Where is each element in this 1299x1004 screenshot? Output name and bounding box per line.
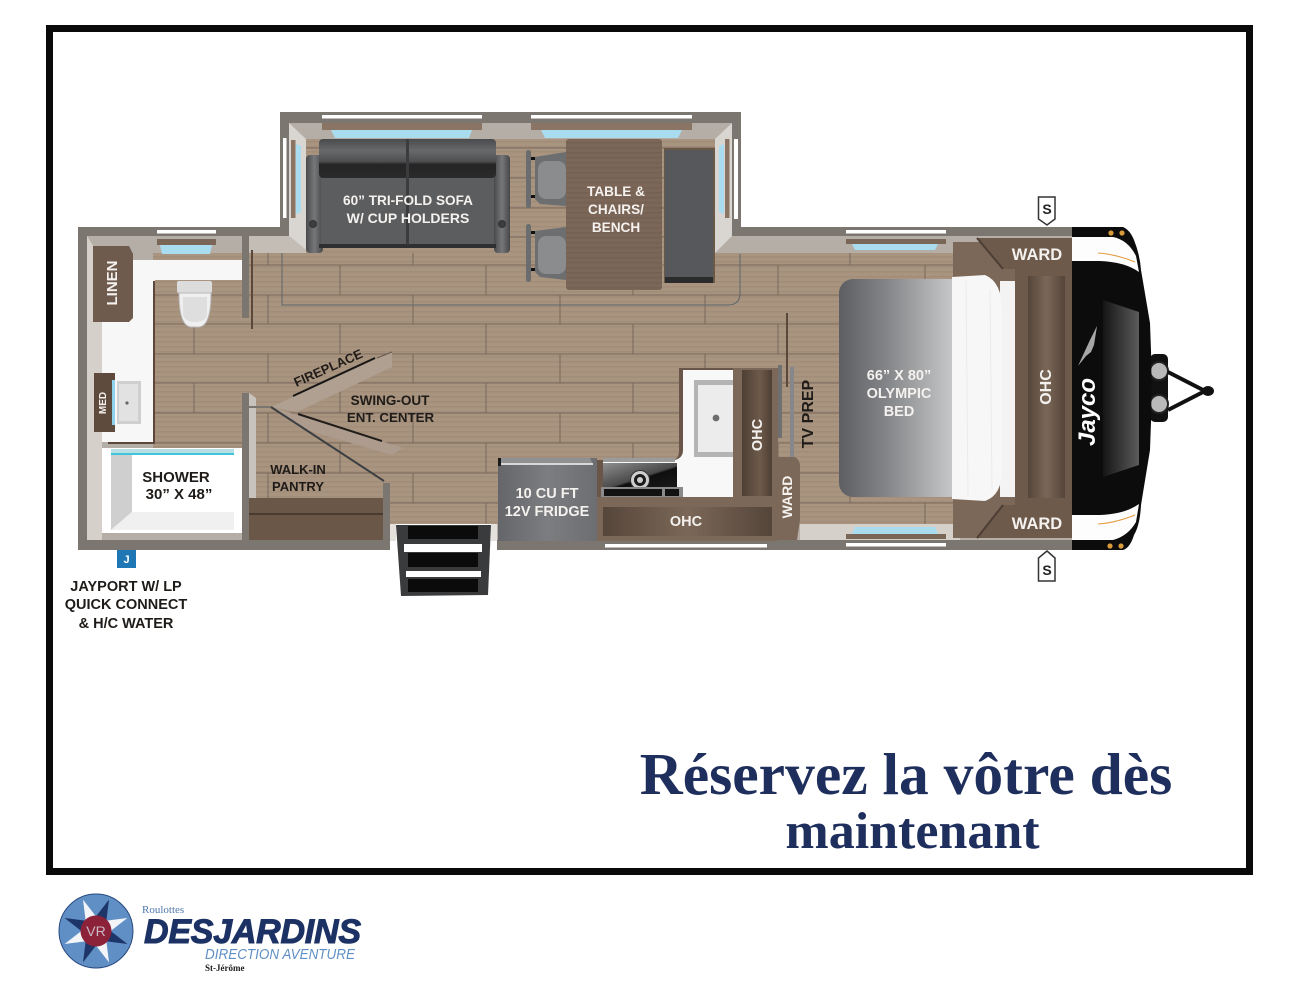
- dining table: [566, 139, 662, 290]
- white cap accents: [1072, 237, 1139, 272]
- sheets: [1000, 281, 1015, 497]
- bathroom partition: [242, 236, 249, 318]
- entertainment center label: ENT. CENTER: [347, 410, 434, 425]
- jayport marker: [117, 550, 136, 568]
- bathroom: [93, 236, 253, 533]
- bed label line two: OLYMPIC: [867, 386, 932, 402]
- logo wordmark: DESJARDINS: [144, 913, 361, 951]
- logo tagline: DIRECTION AVENTURE: [205, 947, 355, 963]
- sofa: [306, 139, 510, 253]
- dining table: CHAIRS/: [588, 202, 644, 217]
- stabilizer marker bottom: [1038, 551, 1055, 581]
- tv prep: TV PREP: [800, 379, 817, 448]
- swing-out label: SWING-OUT: [351, 393, 430, 408]
- kitchen wardrobe: WARD: [779, 476, 795, 518]
- jayco wordmark: Jayco: [1074, 378, 1101, 446]
- bed label line three: BED: [884, 404, 914, 420]
- jayport label: QUICK CONNECT: [65, 597, 187, 613]
- compass badge: [59, 894, 133, 968]
- headline: maintenant: [785, 803, 1040, 860]
- counter: [597, 368, 735, 500]
- wardrobe bottom: [977, 505, 1072, 538]
- page frame: [50, 28, 1250, 872]
- fireplace panel: [271, 352, 392, 412]
- medicine cabinet and vanity: MED: [98, 392, 109, 414]
- mattress: [839, 279, 964, 497]
- side overhead cabinet: [733, 368, 778, 498]
- jayport label: & H/C WATER: [79, 616, 174, 632]
- marker lights: [1108, 230, 1114, 236]
- fireplace label: FIREPLACE: [291, 346, 365, 390]
- side overhead cabinet: OHC: [750, 418, 766, 451]
- stabilizer marker top: S: [1042, 201, 1052, 217]
- entry steps: [390, 524, 497, 596]
- trailer shell walls: [78, 112, 1075, 550]
- dining chairs: [526, 150, 566, 282]
- walk-in pantry: PANTRY: [272, 479, 324, 494]
- bed label: 66” X 80”: [867, 368, 931, 384]
- dining table: TABLE &: [587, 184, 645, 199]
- stabilizer marker bottom: S: [1042, 562, 1052, 578]
- linen cabinet: LINEN: [104, 260, 121, 306]
- slide-out track line: [282, 253, 740, 305]
- wardrobe top: WARD: [1012, 246, 1062, 264]
- headline: Réservez la vôtre dès: [640, 741, 1172, 807]
- refrigerator: 12V FRIDGE: [505, 504, 590, 520]
- compass badge: VR: [86, 923, 106, 939]
- front window panel: [1103, 300, 1139, 477]
- range: [601, 458, 683, 497]
- tv panel: [271, 407, 403, 455]
- shower: [102, 448, 242, 533]
- interior wall band: [87, 123, 1075, 540]
- wardrobe top: [977, 238, 1072, 269]
- jay bird emblem: [1078, 326, 1097, 366]
- duvet: [952, 275, 1002, 501]
- jayport marker: J: [123, 554, 130, 566]
- walk-in pantry: [242, 393, 390, 548]
- logo location: St-Jérôme: [205, 963, 244, 973]
- sofa label line two: W/ CUP HOLDERS: [347, 210, 469, 226]
- lower overhead cabinet: OHC: [670, 514, 703, 530]
- front overhead cabinet: OHC: [1038, 369, 1055, 405]
- walk-in pantry: WALK-IN: [270, 462, 326, 477]
- front overhead cabinet: [1015, 269, 1072, 505]
- toilet: [177, 281, 212, 327]
- refrigerator: 10 CU FT: [516, 486, 579, 502]
- swing-out entertainment center: [249, 346, 434, 481]
- shower: 30” X 48”: [146, 486, 212, 503]
- sofa label: 60” TRI-FOLD SOFA: [343, 193, 473, 208]
- logo: [59, 894, 361, 973]
- kitchen wardrobe: [777, 457, 800, 540]
- logo small name: Roulottes: [142, 904, 184, 916]
- wood floor: [153, 139, 958, 524]
- kitchen: [597, 368, 735, 500]
- windows: [157, 115, 946, 548]
- front cap: [1072, 227, 1152, 550]
- tow hitch: [1150, 354, 1214, 422]
- door edge: [251, 250, 253, 329]
- wardrobe bottom: WARD: [1012, 515, 1062, 533]
- bench: [664, 148, 715, 283]
- tv prep: [778, 313, 817, 457]
- sink: [694, 380, 733, 457]
- floor plan: [65, 112, 1214, 632]
- jayport label: JAYPORT W/ LP: [70, 579, 182, 595]
- shower: SHOWER: [142, 469, 210, 486]
- dining table: BENCH: [592, 220, 640, 235]
- marble counter: [102, 260, 242, 442]
- stabilizer marker top: [1038, 197, 1055, 225]
- headline: [640, 741, 1172, 860]
- refrigerator: [498, 458, 597, 541]
- linen cabinet: [93, 246, 133, 322]
- headboard surround: [953, 242, 1018, 538]
- medicine cabinet and vanity: [94, 373, 141, 432]
- jayport label: [65, 579, 187, 632]
- pantry door: [271, 407, 384, 481]
- lower overhead cabinet: [597, 497, 777, 541]
- bed: [839, 242, 1018, 538]
